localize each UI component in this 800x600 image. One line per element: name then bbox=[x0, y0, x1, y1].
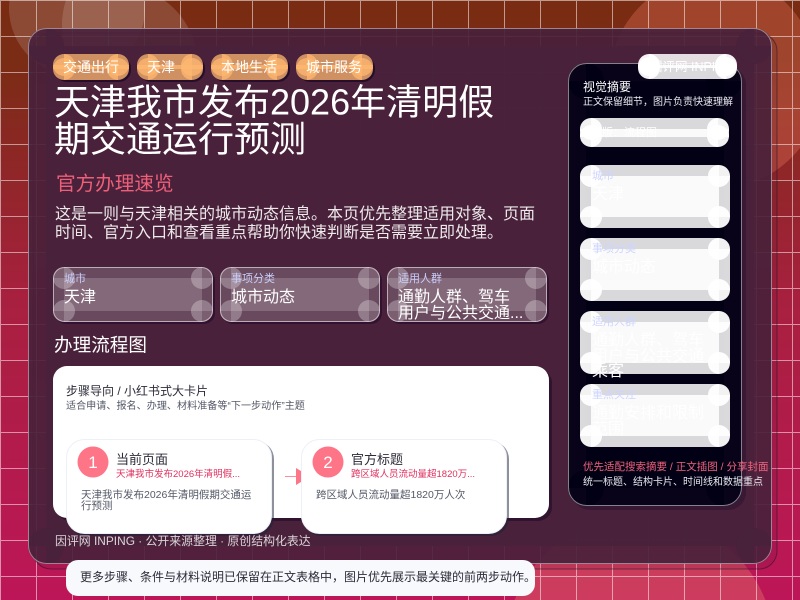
flow card: 适合申请、报名、办理、材料准备等“下一步动作”主题 bbox=[66, 399, 305, 412]
tag: 城市服务 bbox=[296, 54, 375, 82]
tag: 本地生活: 本地生活 bbox=[221, 59, 277, 75]
tag: 交通出行: 交通出行 bbox=[63, 59, 119, 75]
summary: 适用人群 bbox=[580, 311, 730, 380]
step 2: 2 bbox=[323, 453, 333, 472]
title: 期交通运行预测 bbox=[54, 118, 306, 160]
summary: 重点关注: 范围 bbox=[592, 420, 624, 438]
tag: 天津: 天津 bbox=[147, 59, 175, 75]
summary: 城市: 天津 bbox=[592, 185, 624, 203]
step 1: 1 bbox=[88, 453, 98, 472]
summary: 适用人群: 乘客 bbox=[592, 362, 624, 380]
flow card bbox=[53, 366, 552, 521]
summary: 城市 bbox=[580, 165, 730, 228]
summary: 事项分类: 城市动态 bbox=[592, 258, 656, 276]
summary: 重点关注: 通勤安排和限制 bbox=[592, 404, 704, 422]
step 2: 跨区域人员流动量超1820万人次 bbox=[316, 488, 466, 501]
metric: 城市: 天津 bbox=[64, 288, 96, 306]
metric: 城市: 城市 bbox=[64, 271, 86, 285]
description bbox=[55, 205, 535, 242]
metric: 事项分类 bbox=[220, 267, 382, 324]
arrow bbox=[285, 468, 310, 485]
summary: 适用人群: 适用人群 bbox=[592, 314, 636, 328]
description: 时间、官方入口和查看重点帮助你快速判断是否需要立即处理。 bbox=[55, 224, 503, 242]
subtitle: 官方办理速览 bbox=[56, 173, 174, 195]
tag: 天津 bbox=[137, 54, 205, 82]
side notes: 统一标题、结构卡片、时间线和数据重点 bbox=[583, 475, 763, 488]
summary: 重点关注: 重点关注 bbox=[592, 387, 636, 401]
step 1: 天津我市发布2026年清明假期交通运 bbox=[81, 488, 252, 501]
tags bbox=[53, 54, 375, 82]
side notes bbox=[583, 460, 769, 488]
brand pill bbox=[638, 54, 737, 79]
step 2: 跨区域人员流动量超1820万... bbox=[351, 468, 475, 480]
step 2 bbox=[302, 440, 509, 536]
section heading: 办理流程图 bbox=[54, 334, 147, 356]
brand pill: 因评网 INPING bbox=[650, 60, 734, 74]
description: 这是一则与天津相关的城市动态信息。本页优先整理适用对象、页面 bbox=[55, 205, 535, 223]
summary: 事项分类: 事项分类 bbox=[592, 241, 636, 255]
side panel bbox=[568, 54, 769, 510]
bottom note bbox=[66, 560, 536, 596]
metric: 适用人群: 适用人群 bbox=[398, 271, 442, 285]
summary heading: 视觉摘要 bbox=[583, 79, 631, 94]
tag: 本地生活 bbox=[211, 54, 290, 82]
summary heading bbox=[583, 79, 733, 108]
metric: 适用人群: 用户与公共交通... bbox=[398, 304, 523, 322]
metric: 适用人群: 通勤人群、驾车 bbox=[398, 288, 510, 306]
summary: 事项分类 bbox=[580, 238, 730, 301]
flow card: 步骤导向 / 小红书式大卡片 bbox=[66, 383, 208, 398]
summary: 适用人群: 用户与公共交通 bbox=[592, 347, 704, 365]
title: 天津我市发布2026年清明假 bbox=[54, 82, 494, 122]
bottom note: 更多步骤、条件与材料说明已保留在正文表格中，图片优先展示最关键的前两步动作。 bbox=[80, 569, 536, 584]
step 1: 天津我市发布2026年清明假... bbox=[116, 468, 240, 480]
format pill: 模版：流程图 bbox=[591, 125, 657, 139]
tag: 城市服务: 城市服务 bbox=[306, 59, 362, 75]
step 1: 当前页面 bbox=[116, 452, 168, 467]
tag: 交通出行 bbox=[53, 54, 131, 82]
side notes: 优先适配搜索摘要 / 正文插图 / 分享封面 bbox=[583, 460, 769, 473]
metric: 适用人群 bbox=[387, 267, 549, 324]
footer: 因评网 INPING · 公开来源整理 · 原创结构化表达 bbox=[55, 534, 311, 548]
metric cards bbox=[53, 267, 549, 324]
metric: 事项分类: 城市动态 bbox=[231, 288, 295, 306]
summary: 重点关注 bbox=[580, 384, 730, 447]
step 1: 行预测 bbox=[81, 499, 112, 512]
summary: 城市: 城市 bbox=[592, 168, 614, 182]
format pill bbox=[580, 118, 729, 147]
step 2: 官方标题 bbox=[351, 452, 403, 467]
title bbox=[54, 82, 494, 160]
metric: 事项分类: 事项分类 bbox=[231, 271, 275, 285]
summary heading: 正文保留细节，图片负责快速理解 bbox=[583, 95, 733, 108]
metric: 城市 bbox=[53, 267, 215, 324]
step 1 bbox=[66, 440, 274, 536]
summary: 适用人群: 通勤人群、驾车 bbox=[592, 331, 704, 349]
